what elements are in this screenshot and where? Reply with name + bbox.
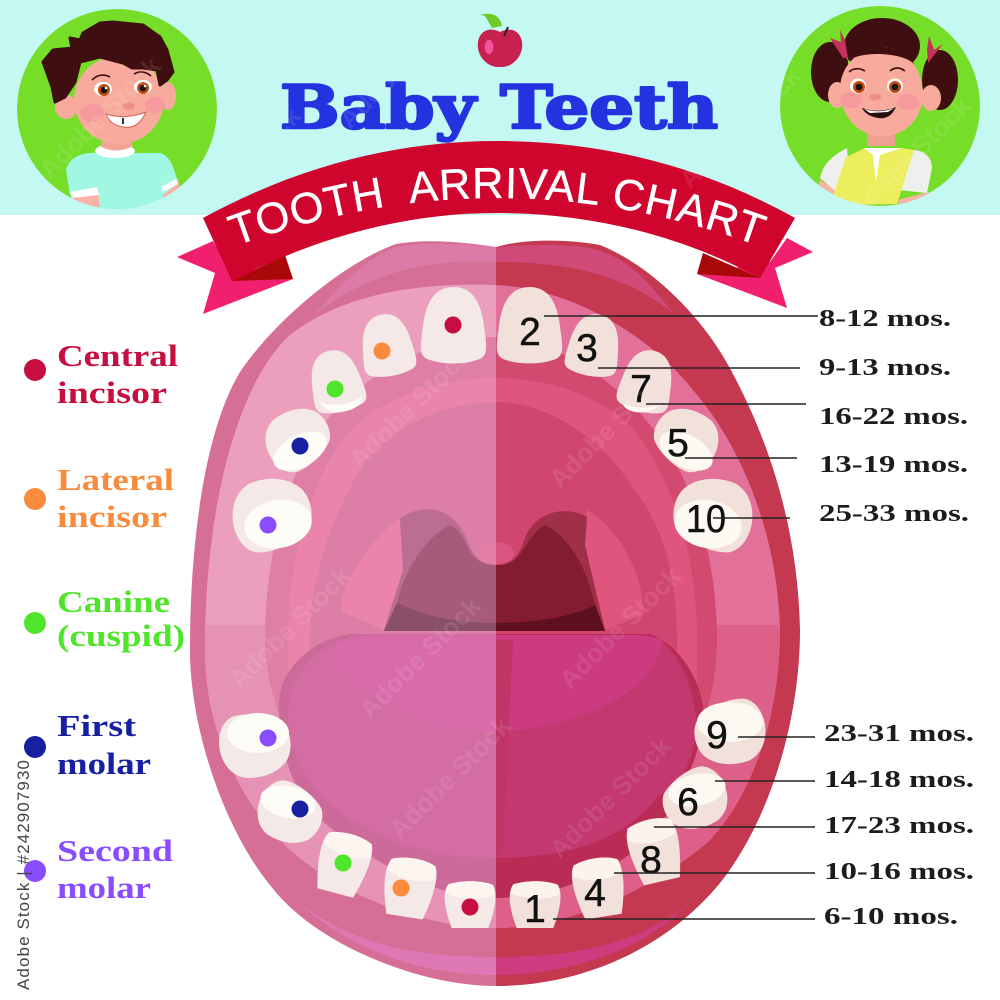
tooth 8 (623, 814, 687, 887)
tooth: upper left lateral incisor (356, 310, 418, 380)
lower right teeth (510, 696, 770, 931)
tooth 5 (644, 398, 729, 480)
eruption age lines and labels (544, 306, 974, 930)
girl arms (818, 180, 930, 204)
icon: apple (478, 14, 522, 67)
age: tooth 10: 25-33 mos. (819, 501, 969, 527)
tooth 3: 3 (576, 327, 598, 370)
boy hair (43, 22, 173, 102)
tooth 2 (497, 287, 562, 363)
tooth 5: 5 (667, 422, 689, 465)
watermarks: Adobe Stock (223, 560, 357, 694)
boy eyes (94, 82, 112, 96)
tooth 7: 7 (630, 368, 652, 411)
boy shirt (66, 153, 178, 212)
ribbon main band (203, 141, 795, 281)
tooth: upper left second molar (228, 474, 316, 556)
girl eyes (850, 78, 866, 94)
age: tooth 6: 14-18 mos. (824, 767, 974, 793)
watermarks: Adobe Stock (353, 590, 487, 724)
watermarks: Adobe Stock (383, 710, 517, 844)
portrait: girl (780, 6, 980, 208)
tooth 1: 1 (524, 888, 546, 931)
girl bows (830, 30, 848, 58)
watermarks: Adobe Stock (843, 90, 977, 224)
watermarks: Adobe Stock (173, 100, 307, 234)
tooth 9 (690, 696, 770, 769)
legend: central incisor (24, 338, 178, 410)
girl mouth (862, 107, 896, 118)
mouth left half (190, 241, 496, 986)
title: Baby Teeth (280, 73, 718, 143)
boy head (55, 95, 77, 119)
tooth 9: 9 (706, 714, 728, 757)
legend: first molar (24, 708, 151, 781)
age: tooth 7: 16-22 mos. (819, 404, 968, 430)
tooth: lower left central incisor (445, 881, 496, 928)
watermarks: Adobe Stock (333, 0, 467, 134)
age: tooth 2: 8-12 mos. (819, 306, 951, 332)
legend: second molar: molar (57, 870, 151, 905)
upper left teeth (228, 287, 486, 556)
tooth 4: 4 (584, 872, 606, 915)
lower left teeth (215, 709, 496, 928)
girl dress (833, 148, 914, 205)
age: tooth 3: 9-13 mos. (819, 355, 951, 381)
watermarks: Adobe Stock (543, 730, 677, 864)
watermarks: Adobe Stock (673, 60, 807, 194)
mouth right half (496, 240, 800, 986)
tooth 6 (654, 760, 736, 838)
legend: central incisor: incisor (57, 375, 167, 410)
age: tooth 9: 23-31 mos. (824, 721, 974, 747)
tooth: upper left canine (303, 345, 369, 418)
watermarks: Adobe Stock (543, 360, 677, 494)
age: tooth 4: 10-16 mos. (824, 859, 974, 885)
tooth: lower left canine (311, 828, 376, 900)
portrait: boy (17, 9, 217, 212)
stock credit: Adobe Stock | #242907930 (14, 760, 33, 990)
girl head (828, 82, 842, 108)
tooth: lower left first molar (249, 774, 331, 852)
girl hair buns (811, 42, 849, 102)
tooth 7 (614, 345, 680, 418)
boy mouth (106, 112, 146, 127)
tooth 2: 2 (519, 311, 541, 354)
age: tooth 5: 13-19 mos. (819, 452, 968, 478)
girl sleeves (820, 148, 932, 193)
tooth 8: 8 (640, 839, 662, 882)
tooth 10: 10 (686, 498, 726, 541)
legend: lateral incisor (24, 462, 174, 534)
legend: central incisor: Central (57, 338, 178, 373)
legend (24, 338, 185, 905)
watermarks: Adobe Stock (553, 560, 687, 694)
tooth 4 (569, 854, 629, 921)
legend: lateral incisor: incisor (57, 499, 167, 534)
legend: first molar: First (57, 708, 137, 743)
age: tooth 1: 6-10 mos. (824, 904, 958, 930)
tooth 6: 6 (677, 781, 699, 824)
legend: first molar: molar (57, 746, 151, 781)
tooth 1 (510, 881, 561, 931)
mouth illustration (190, 241, 800, 986)
ribbon right tail (697, 238, 813, 308)
ribbon heading: TOOTH ARRIVAL CHART (226, 168, 768, 242)
ribbon banner (177, 141, 813, 314)
tooth: upper left central incisor (421, 287, 486, 363)
legend: lateral incisor: Lateral (57, 462, 174, 497)
legend: second molar (24, 833, 173, 905)
tooth: upper left first molar (255, 398, 340, 480)
watermarks: Adobe Stock (343, 340, 477, 474)
watermarks: Adobe Stock (33, 50, 167, 184)
tooth 10 (669, 474, 757, 556)
tooth: lower left lateral incisor (379, 854, 439, 921)
header background band (0, 0, 1000, 215)
ribbon left tail (177, 241, 293, 314)
legend: canine (24, 584, 185, 653)
tooth 3 (563, 310, 625, 380)
upper right teeth (497, 287, 757, 556)
boy arms (70, 178, 180, 210)
ribbon right fold (697, 253, 760, 278)
legend: canine: (cuspid) (57, 618, 185, 653)
legend: second molar: Second (57, 833, 173, 868)
tooth: lower left second molar (215, 709, 295, 782)
legend: canine: Canine (57, 584, 170, 619)
ribbon left fold (232, 255, 293, 281)
age: tooth 8: 17-23 mos. (824, 813, 974, 839)
